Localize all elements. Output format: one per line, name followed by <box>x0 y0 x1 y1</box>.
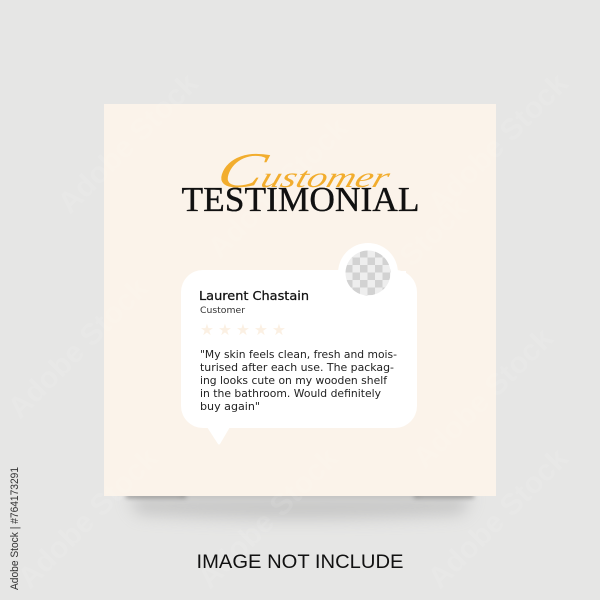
star rating: ★ <box>254 321 268 339</box>
testimonial quote: in the bathroom. Would definitely <box>200 388 381 400</box>
star rating: ★ <box>200 321 214 339</box>
stock id label: Adobe Stock | #764173291 <box>9 467 21 590</box>
star rating: ★ <box>218 321 232 339</box>
star rating <box>200 321 286 339</box>
watermark: Adobe Stock <box>422 442 575 595</box>
watermark: Adobe Stock <box>322 192 475 345</box>
customer role: Customer <box>200 306 245 316</box>
caption: image not include: IMAGE NOT INCLUDE <box>196 552 404 573</box>
testimonial quote <box>200 349 397 413</box>
watermark: Adobe Stock <box>12 442 165 595</box>
star rating: ★ <box>236 321 250 339</box>
watermark: Adobe Stock <box>422 67 575 220</box>
title: Testimonial: TESTIMONIAL <box>182 180 420 219</box>
panel: speech bubble <box>181 243 417 444</box>
watermark: Adobe Stock <box>407 322 560 475</box>
testimonial quote: turised after each use. The packag- <box>200 362 394 374</box>
customer name: Laurent Chastain <box>199 288 309 303</box>
watermark: Adobe Stock <box>202 112 355 265</box>
watermark: Adobe Stock <box>52 67 205 220</box>
title: Customer script: Customer <box>210 143 401 199</box>
testimonial quote: buy again" <box>200 401 260 413</box>
star rating: ★ <box>272 321 286 339</box>
testimonial quote: ing looks cute on my wooden shelf <box>200 375 387 387</box>
testimonial quote: "My skin feels clean, fresh and mois- <box>200 349 397 361</box>
avatar placeholder <box>346 250 390 296</box>
watermark: Adobe Stock <box>192 442 345 595</box>
card shadow <box>126 494 474 519</box>
watermark: Adobe Stock <box>2 272 155 425</box>
panel: testimonial card <box>104 104 496 496</box>
